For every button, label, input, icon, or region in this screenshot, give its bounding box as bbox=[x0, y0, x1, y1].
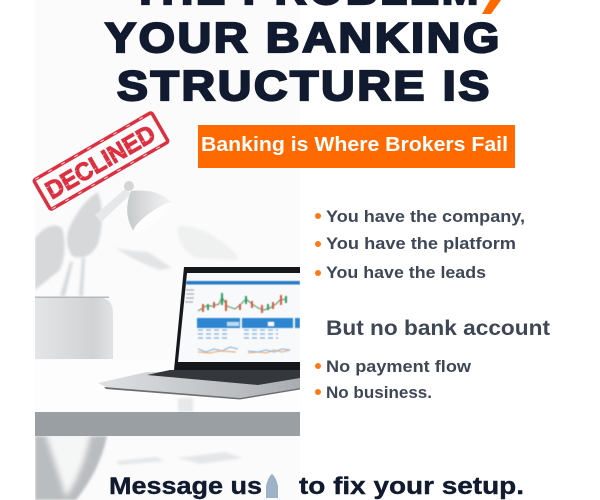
desk lamp bbox=[95, 181, 170, 231]
list: no bbox=[315, 358, 471, 402]
stamp: declined bbox=[34, 112, 168, 210]
candlestick chart bbox=[198, 293, 287, 313]
sidebar bbox=[185, 290, 194, 302]
top nav bar bbox=[186, 281, 300, 284]
panel: desk photo bbox=[35, 181, 300, 500]
cta text start: Message us bbox=[109, 473, 262, 500]
subheading: But no bank account bbox=[326, 317, 550, 340]
banner bbox=[198, 125, 515, 168]
title line 2: YOUR BANKING bbox=[105, 14, 502, 61]
list: you have bbox=[315, 208, 525, 282]
stamp text: DECLINED bbox=[41, 120, 160, 205]
floor shadows bbox=[117, 452, 243, 465]
orange slash bbox=[482, 0, 501, 14]
title bbox=[105, 0, 502, 109]
banner text: Banking is Where Brokers Fail bbox=[201, 134, 508, 156]
bullet 5: No business. bbox=[326, 384, 432, 402]
plant pot bbox=[35, 296, 113, 359]
bullet 1: You have the company, bbox=[326, 208, 525, 226]
table leg shadow bbox=[35, 432, 107, 500]
table leg shadow above band bbox=[178, 398, 193, 412]
laptop lid bbox=[174, 267, 300, 370]
bullet 3: You have the leads bbox=[326, 264, 486, 282]
laptop screen bbox=[178, 273, 300, 362]
small line charts bbox=[198, 347, 290, 353]
plant shadow bbox=[35, 192, 238, 296]
laptop bbox=[98, 267, 300, 400]
title line 3: STRUCTURE IS bbox=[117, 62, 492, 109]
call to action bbox=[109, 473, 524, 500]
cta text end: to fix your setup. bbox=[299, 473, 524, 500]
bullet 2: You have the platform bbox=[326, 235, 516, 253]
data tables bbox=[197, 318, 300, 338]
table edge band bbox=[35, 412, 300, 436]
bullet 4: No payment flow bbox=[326, 358, 471, 376]
laptop base bbox=[98, 372, 300, 398]
icon: pointing hand bbox=[266, 474, 278, 498]
table surface bbox=[35, 360, 300, 412]
